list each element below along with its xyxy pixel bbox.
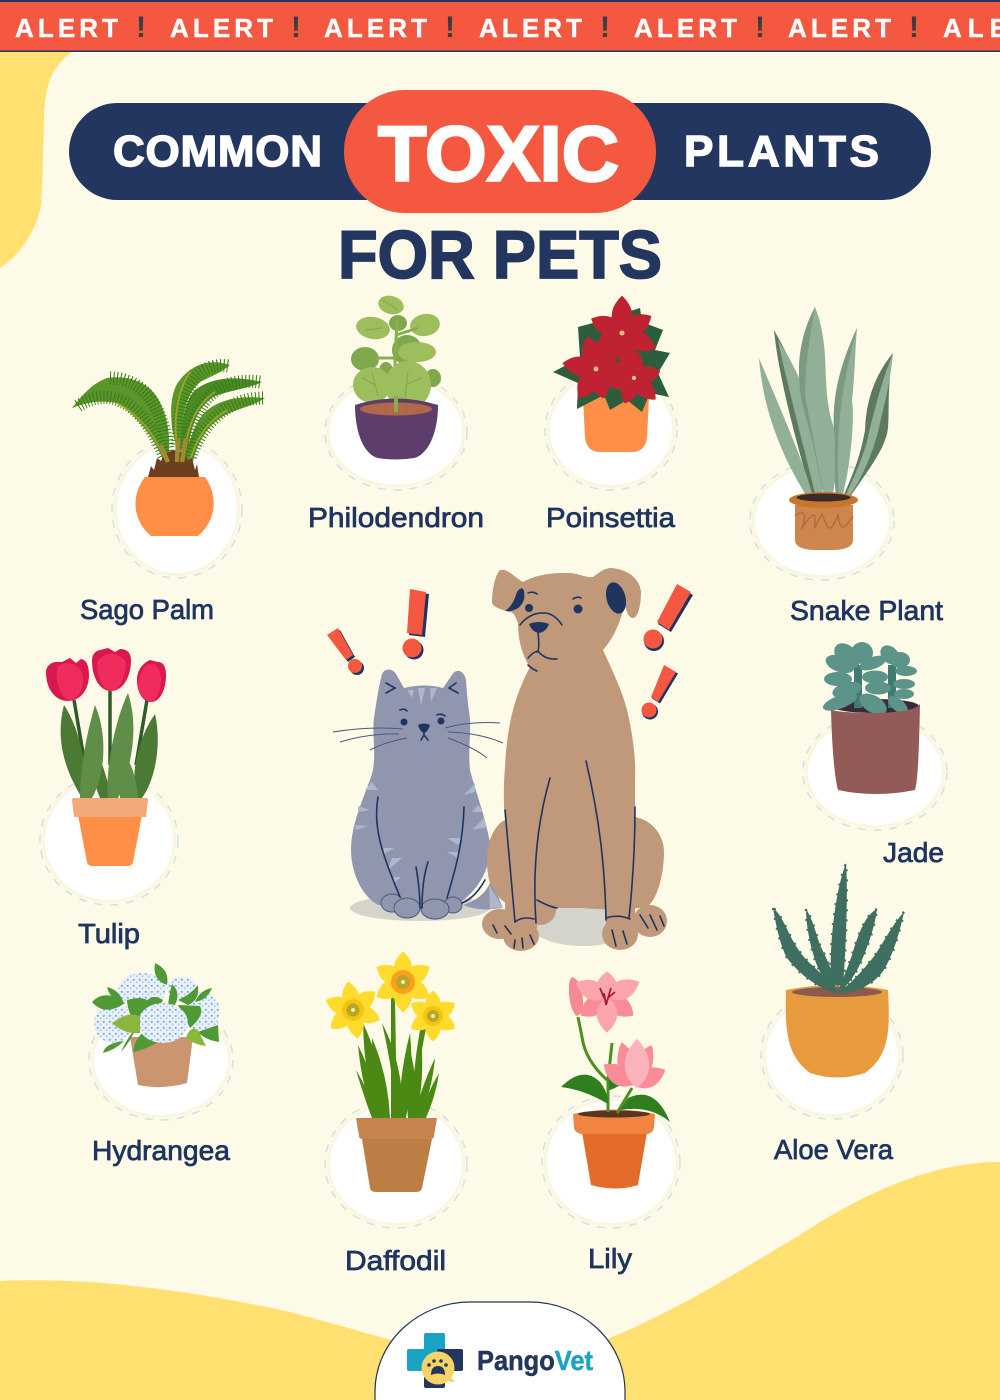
stems — [578, 1017, 632, 1113]
plant: Hydrangea — [89, 963, 233, 1166]
leaves — [561, 1072, 670, 1122]
plant: Aloe Vera — [761, 863, 904, 1165]
dog nose — [529, 622, 549, 633]
alert banner: ! — [600, 11, 610, 44]
stem base — [394, 396, 398, 412]
backdrop circle — [325, 1100, 467, 1228]
backdrop circle — [545, 370, 677, 490]
heading word: PLANTS: PLANTS — [684, 127, 879, 176]
alert banner: ALERT — [324, 13, 427, 43]
plant: Snake Plant — [750, 307, 943, 626]
alert banner: ! — [445, 11, 455, 44]
cat eyes — [400, 718, 444, 726]
pot — [355, 398, 438, 460]
alert banner — [0, 0, 1000, 52]
alert banner: ! — [291, 11, 301, 44]
alert banner: ! — [136, 11, 146, 44]
dog shadow — [531, 904, 635, 946]
aloe leaves — [773, 863, 904, 993]
exclamation mark — [642, 665, 678, 720]
exclamation mark — [644, 584, 693, 651]
alert banner: ALERT — [788, 13, 891, 43]
pot — [135, 477, 214, 536]
leaves — [61, 693, 158, 798]
stems and blades — [356, 998, 439, 1120]
icon: vet cross with paw — [407, 1333, 463, 1388]
cat shadow — [350, 895, 490, 921]
backdrop circle — [750, 462, 894, 580]
plant: Lily — [542, 972, 680, 1274]
alert banner: ALERT — [634, 13, 737, 43]
alert banner: ! — [909, 11, 919, 44]
alert banner: ALERT — [15, 13, 118, 43]
label: Daffodil — [345, 1245, 446, 1276]
cat whiskers — [333, 723, 503, 758]
plant: Daffodil — [323, 951, 467, 1276]
flowers — [323, 951, 459, 1042]
alert banner: ALERT — [170, 13, 273, 43]
alert banner: ALERT — [479, 13, 582, 43]
backdrop circle — [761, 991, 903, 1119]
leaves — [351, 293, 442, 412]
exclamation mark — [327, 628, 364, 675]
label: Poinsettia — [546, 502, 675, 533]
flowers — [46, 648, 166, 702]
navy title pill — [69, 103, 931, 200]
backdrop circle — [803, 714, 947, 830]
front cluster — [138, 1003, 188, 1043]
cat tail — [463, 880, 503, 909]
plant: Philodendron — [308, 293, 484, 533]
label: Hydrangea — [92, 1135, 230, 1166]
frond stems — [160, 438, 186, 462]
heading line: FOR PETS: FOR PETS — [338, 217, 662, 293]
pot — [583, 397, 649, 452]
pot — [573, 1110, 655, 1188]
plant: Sago Palm — [72, 362, 265, 625]
logo panel — [375, 1302, 625, 1400]
dog eyes — [525, 604, 582, 614]
logo wordmark: PangoVet — [477, 1345, 593, 1376]
palm fronds — [72, 362, 265, 462]
label: Tulip — [78, 918, 140, 949]
backdrop circle — [325, 374, 467, 490]
dog paws — [482, 890, 667, 951]
label: Sago Palm — [80, 594, 214, 625]
label: Snake Plant — [790, 595, 943, 626]
pot soil — [792, 987, 882, 997]
cat nose — [418, 724, 430, 733]
leaves — [759, 307, 893, 498]
lily flowers — [569, 972, 669, 1094]
backdrop circle — [112, 440, 242, 578]
yellow corner shape: top left — [0, 51, 73, 268]
alert banner: ! — [755, 11, 765, 44]
plant: Tulip — [40, 648, 178, 949]
pot — [789, 492, 858, 550]
red title pill — [344, 90, 656, 213]
heading word: TOXIC: TOXIC — [378, 110, 619, 198]
pot — [786, 985, 889, 1078]
label: Philodendron — [308, 502, 484, 533]
illustration: cat — [333, 670, 503, 921]
plant: Jade — [803, 638, 947, 868]
pot — [72, 798, 148, 866]
pot — [831, 704, 920, 794]
trunk — [148, 450, 199, 477]
heading word: COMMON: COMMON — [113, 127, 322, 176]
leaves — [553, 308, 670, 412]
cat lines — [377, 683, 485, 908]
flowers — [561, 296, 662, 406]
soil — [360, 402, 432, 416]
title — [69, 90, 931, 293]
yellow wave: bottom — [0, 1162, 1000, 1400]
pot inner — [831, 699, 919, 713]
dog lines — [493, 592, 664, 948]
backdrop circle — [542, 1096, 680, 1228]
pot — [130, 1037, 193, 1087]
flower clusters — [94, 973, 220, 1043]
cat paws — [381, 894, 462, 919]
leaves — [821, 638, 917, 719]
leaves — [92, 963, 219, 1053]
label: Aloe Vera — [774, 1134, 893, 1165]
front leaves — [112, 1015, 206, 1046]
stems — [74, 690, 147, 765]
dog body — [487, 568, 664, 910]
backdrop circle — [40, 775, 178, 905]
cat body — [351, 670, 490, 905]
exclamation mark — [402, 589, 429, 660]
label: Jade — [883, 837, 944, 868]
cat stripes — [355, 688, 487, 884]
dog ears inner — [505, 580, 629, 616]
plant: Poinsettia — [545, 296, 677, 533]
label: Lily — [588, 1243, 632, 1274]
pot — [356, 1118, 437, 1192]
backdrop circle — [89, 1000, 233, 1120]
illustration: dog — [482, 568, 667, 951]
